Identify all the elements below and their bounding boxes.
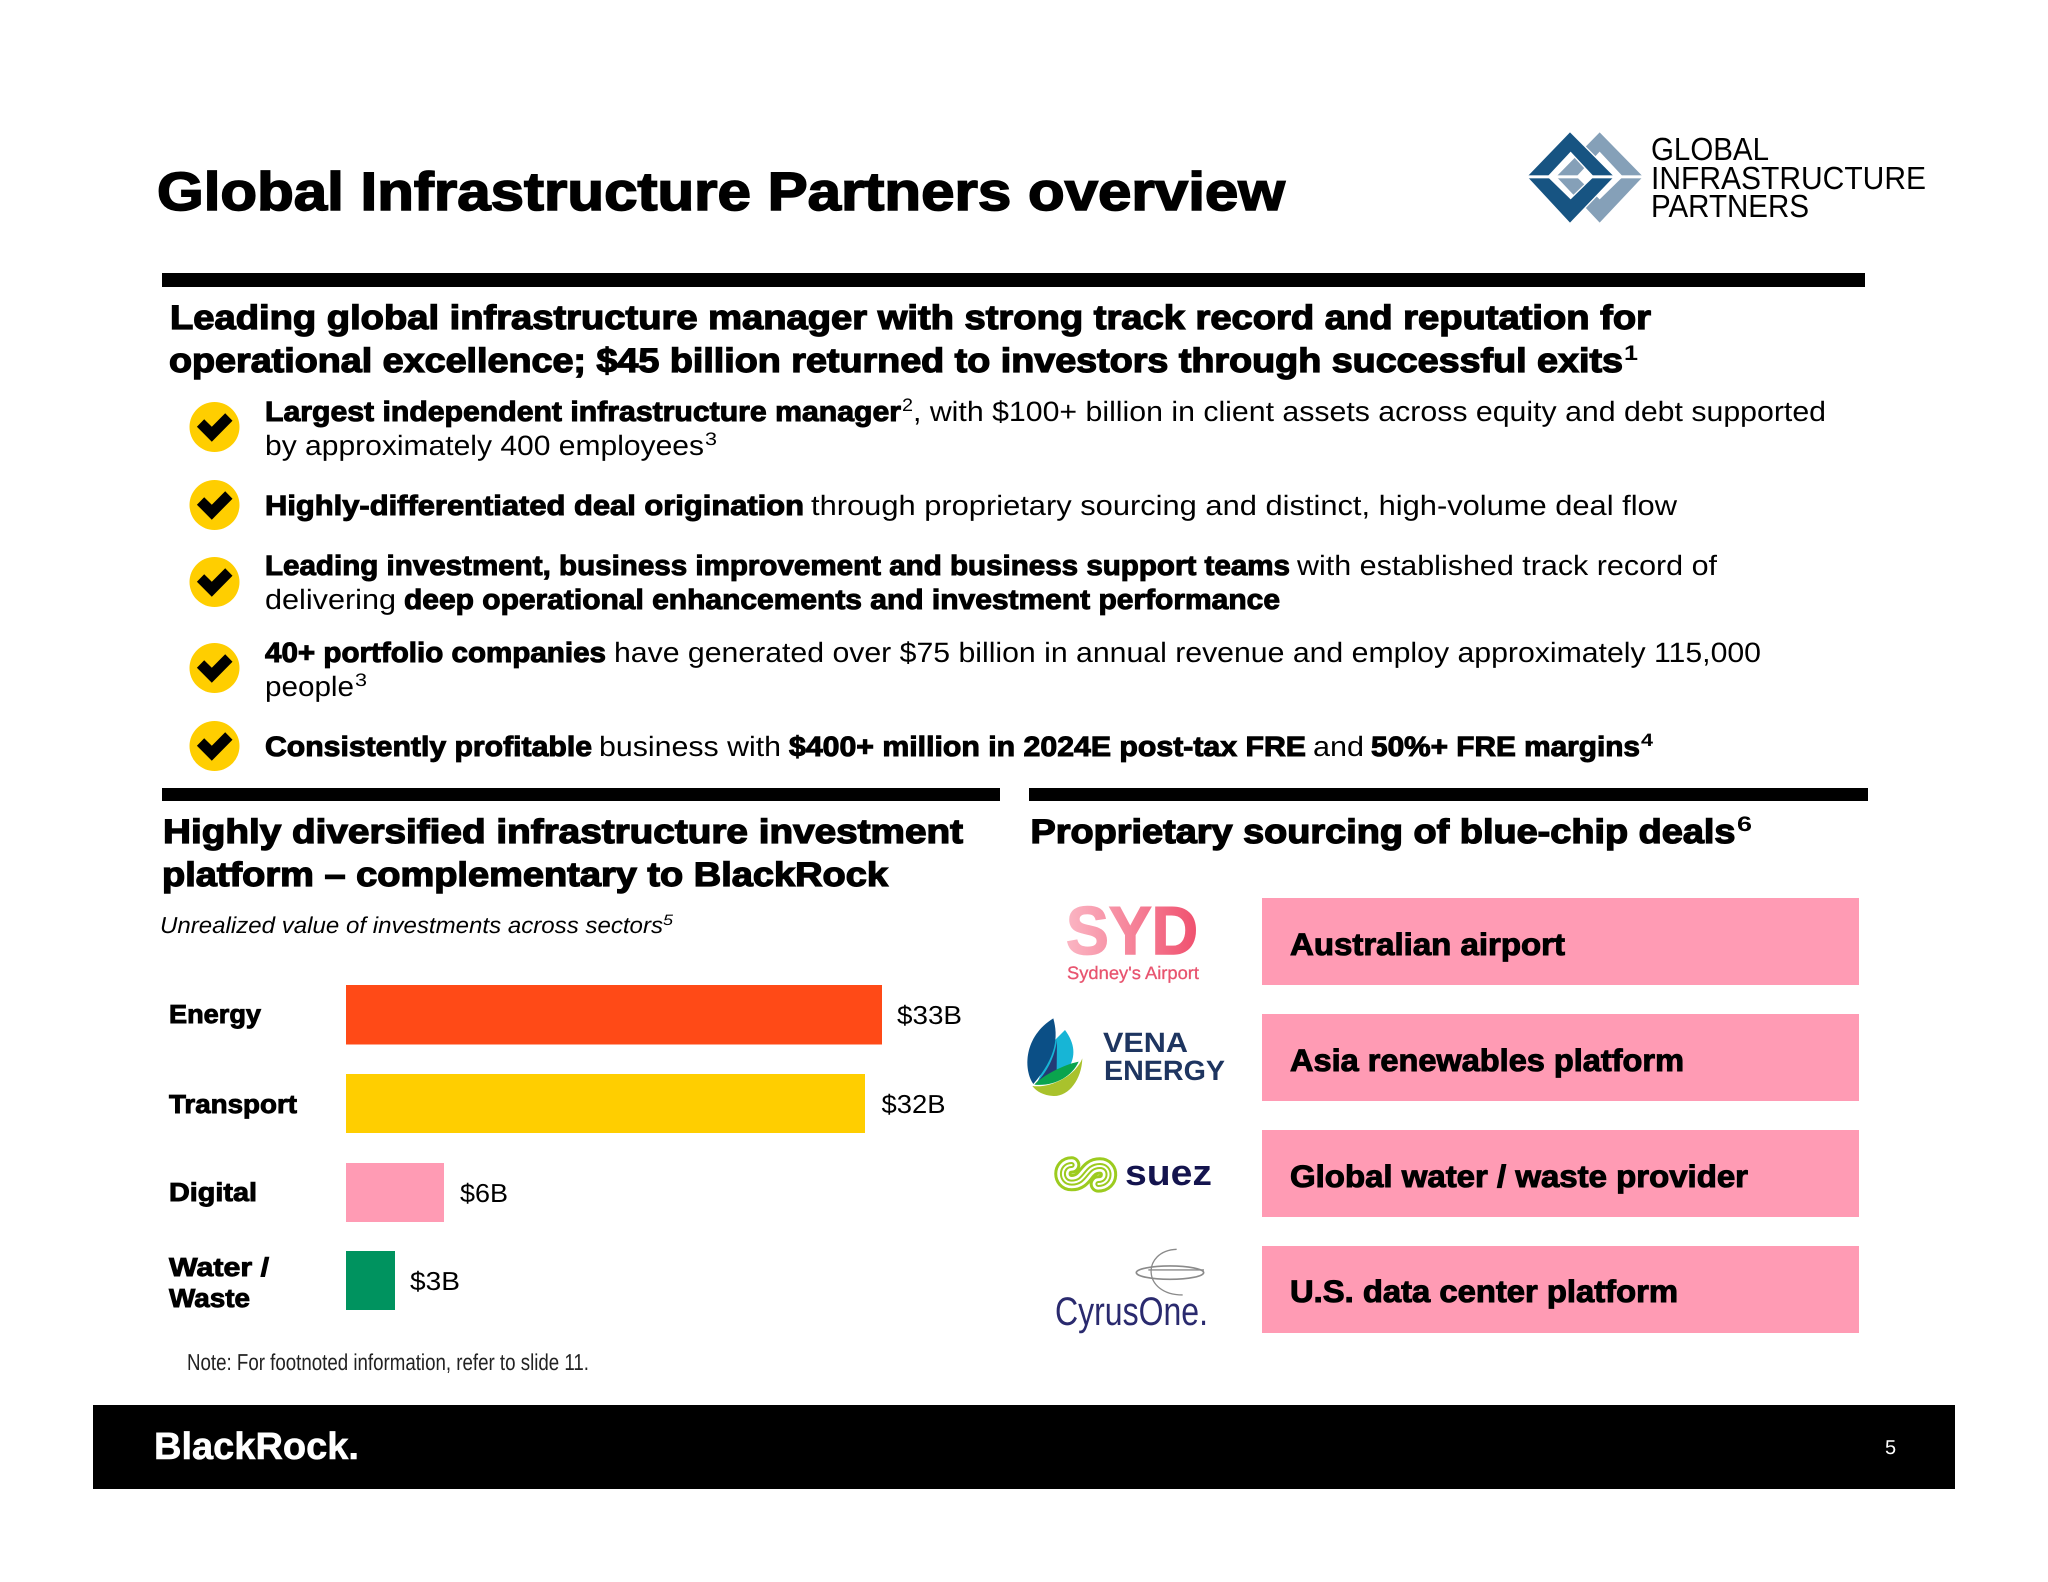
bar: Water / Waste: Water /: [169, 1252, 269, 1282]
BlackRock wordmark: BlackRock.: [154, 1426, 359, 1468]
deal: Australian airport: Australian airport: [1290, 927, 1565, 962]
bullet text: , with $100+ billion in client assets across equity and debt supported: [913, 396, 1826, 427]
deal: Global water / waste provider: [1262, 1130, 1859, 1217]
bullet 2: [190, 480, 1678, 530]
bullet text: Largest independent infrastructure manager: [265, 396, 901, 427]
chart subtitle: Unrealized value of investments across sectors: [160, 912, 664, 938]
logo wordmark: GLOBAL: [1651, 131, 1769, 167]
bullet text: and: [1313, 731, 1364, 762]
logo: Suez: suez: [1125, 1152, 1212, 1193]
bullet text: [265, 395, 1826, 461]
chart subtitle: 5: [663, 912, 674, 929]
deal: Asia renewables platform: [1262, 1014, 1859, 1101]
logo: CyrusOne: CyrusOne.: [1055, 1290, 1208, 1334]
bullet text: 2: [902, 395, 913, 415]
deal: U.S. data center platform: [1262, 1246, 1859, 1333]
heading: diversified platform: platform – complementary to BlackRock: [162, 856, 888, 894]
bullet text: 4: [1641, 730, 1653, 750]
title: Global Infrastructure Partners overview: [157, 162, 1286, 222]
bar: Energy: Energy: [169, 999, 262, 1029]
bar: Energy: $33B: [897, 1000, 962, 1030]
deal: U.S. data center platform: U.S. data center platform: [1290, 1274, 1678, 1309]
icon: check: [190, 557, 240, 607]
page number: 5: [1885, 1437, 1896, 1459]
logo wordmark: [1651, 131, 1926, 224]
heading: overview: operational excellence; $45 billion returned to investors through successful exits: [169, 342, 1623, 380]
deal: Global water / waste provider: Global water / waste provider: [1290, 1159, 1748, 1194]
heading: diversified platform: Highly diversified infrastructure investment: [163, 813, 963, 851]
bullet text: $400+ million in 2024E post-tax FRE: [789, 731, 1306, 762]
bullet 5: [190, 721, 1653, 771]
bar: Digital: $6B: [460, 1178, 508, 1208]
icon: check: [190, 480, 240, 530]
bar: Transport: Transport: [169, 1089, 297, 1119]
bullet 1: [190, 395, 1826, 461]
logo: Global Infrastructure Partners: [1526, 131, 1926, 224]
panel: overview: [162, 273, 1865, 771]
panel: sector bar chart: [160, 788, 1000, 1313]
deal: Australian airport: [1262, 898, 1859, 985]
heading: overview: Leading global infrastructure manager with strong track record and reputation for: [170, 299, 1651, 337]
logo: CyrusOne: [1055, 1249, 1208, 1334]
logo: Sydney's Airport: Sydney's Airport: [1067, 963, 1199, 983]
icon: check: [190, 721, 240, 771]
bullet text: with established track record of: [1296, 550, 1717, 581]
bar: Transport: [169, 1074, 946, 1133]
logo: Sydney's Airport: SYD: [1066, 893, 1198, 969]
bar: Water / Waste: [169, 1251, 460, 1313]
bar: Transport: $32B: [882, 1089, 946, 1119]
logo wordmark: INFRASTRUCTURE: [1651, 160, 1926, 196]
bullet text: [265, 550, 1717, 615]
heading: overview: 1: [1624, 342, 1638, 365]
bullet 3: [190, 550, 1717, 615]
bullet 4: [190, 637, 1761, 702]
bullet text: 40+ portfolio companies: [265, 637, 606, 668]
heading: proprietary sourcing: Proprietary sourcing of blue-chip deals: [1030, 813, 1736, 851]
bar: Water / Waste: $3B: [410, 1266, 460, 1296]
bullet text: have generated over $75 billion in annual revenue and employ approximately 115,000: [614, 637, 1761, 668]
bullet text: [265, 637, 1761, 702]
logo: Vena Energy: ENERGY: [1104, 1055, 1225, 1086]
bullet text: 3: [355, 670, 367, 690]
logo: Vena Energy: VENA: [1103, 1027, 1188, 1058]
icon: check: [190, 643, 240, 693]
bullet text: business with: [599, 731, 781, 762]
bar: Digital: Digital: [169, 1177, 257, 1207]
bullet text: people: [265, 671, 354, 702]
bullet text: Highly-differentiated deal origination: [265, 490, 804, 521]
bullet text: by approximately 400 employees: [265, 430, 704, 461]
heading: proprietary sourcing: 6: [1737, 813, 1752, 836]
footnote: Note: For footnoted information, refer to slide 11.: [187, 1349, 589, 1375]
bullet text: 50%+ FRE margins: [1371, 731, 1640, 762]
bullet text: deep operational enhancements and investment performance: [404, 584, 1280, 615]
bullet text: Consistently profitable: [265, 731, 592, 762]
heading: diversified platform: [162, 813, 963, 894]
footer bar: [93, 1405, 1955, 1489]
bar: Digital: [169, 1163, 508, 1222]
bar: Water / Waste: Waste: [169, 1283, 250, 1313]
logo wordmark: PARTNERS: [1651, 188, 1809, 224]
logo: Vena Energy: [1027, 1018, 1225, 1096]
bar: Energy: [169, 985, 962, 1044]
bullet text: delivering: [265, 584, 396, 615]
icon: interlocking diamonds: [1526, 132, 1646, 223]
icon: check: [190, 402, 240, 452]
bullet text: Leading investment, business improvement and business support teams: [265, 550, 1290, 581]
bullet text: 3: [705, 429, 717, 449]
bullet text: [265, 730, 1653, 762]
deal: Asia renewables platform: Asia renewables platform: [1290, 1043, 1684, 1078]
heading: overview: [169, 299, 1651, 380]
panel: blue-chip deals: [1027, 788, 1868, 1334]
bullet text: [265, 490, 1678, 521]
logo: Suez: [1063, 1152, 1212, 1193]
bullet text: through proprietary sourcing and distinct, high-volume deal flow: [811, 490, 1678, 521]
